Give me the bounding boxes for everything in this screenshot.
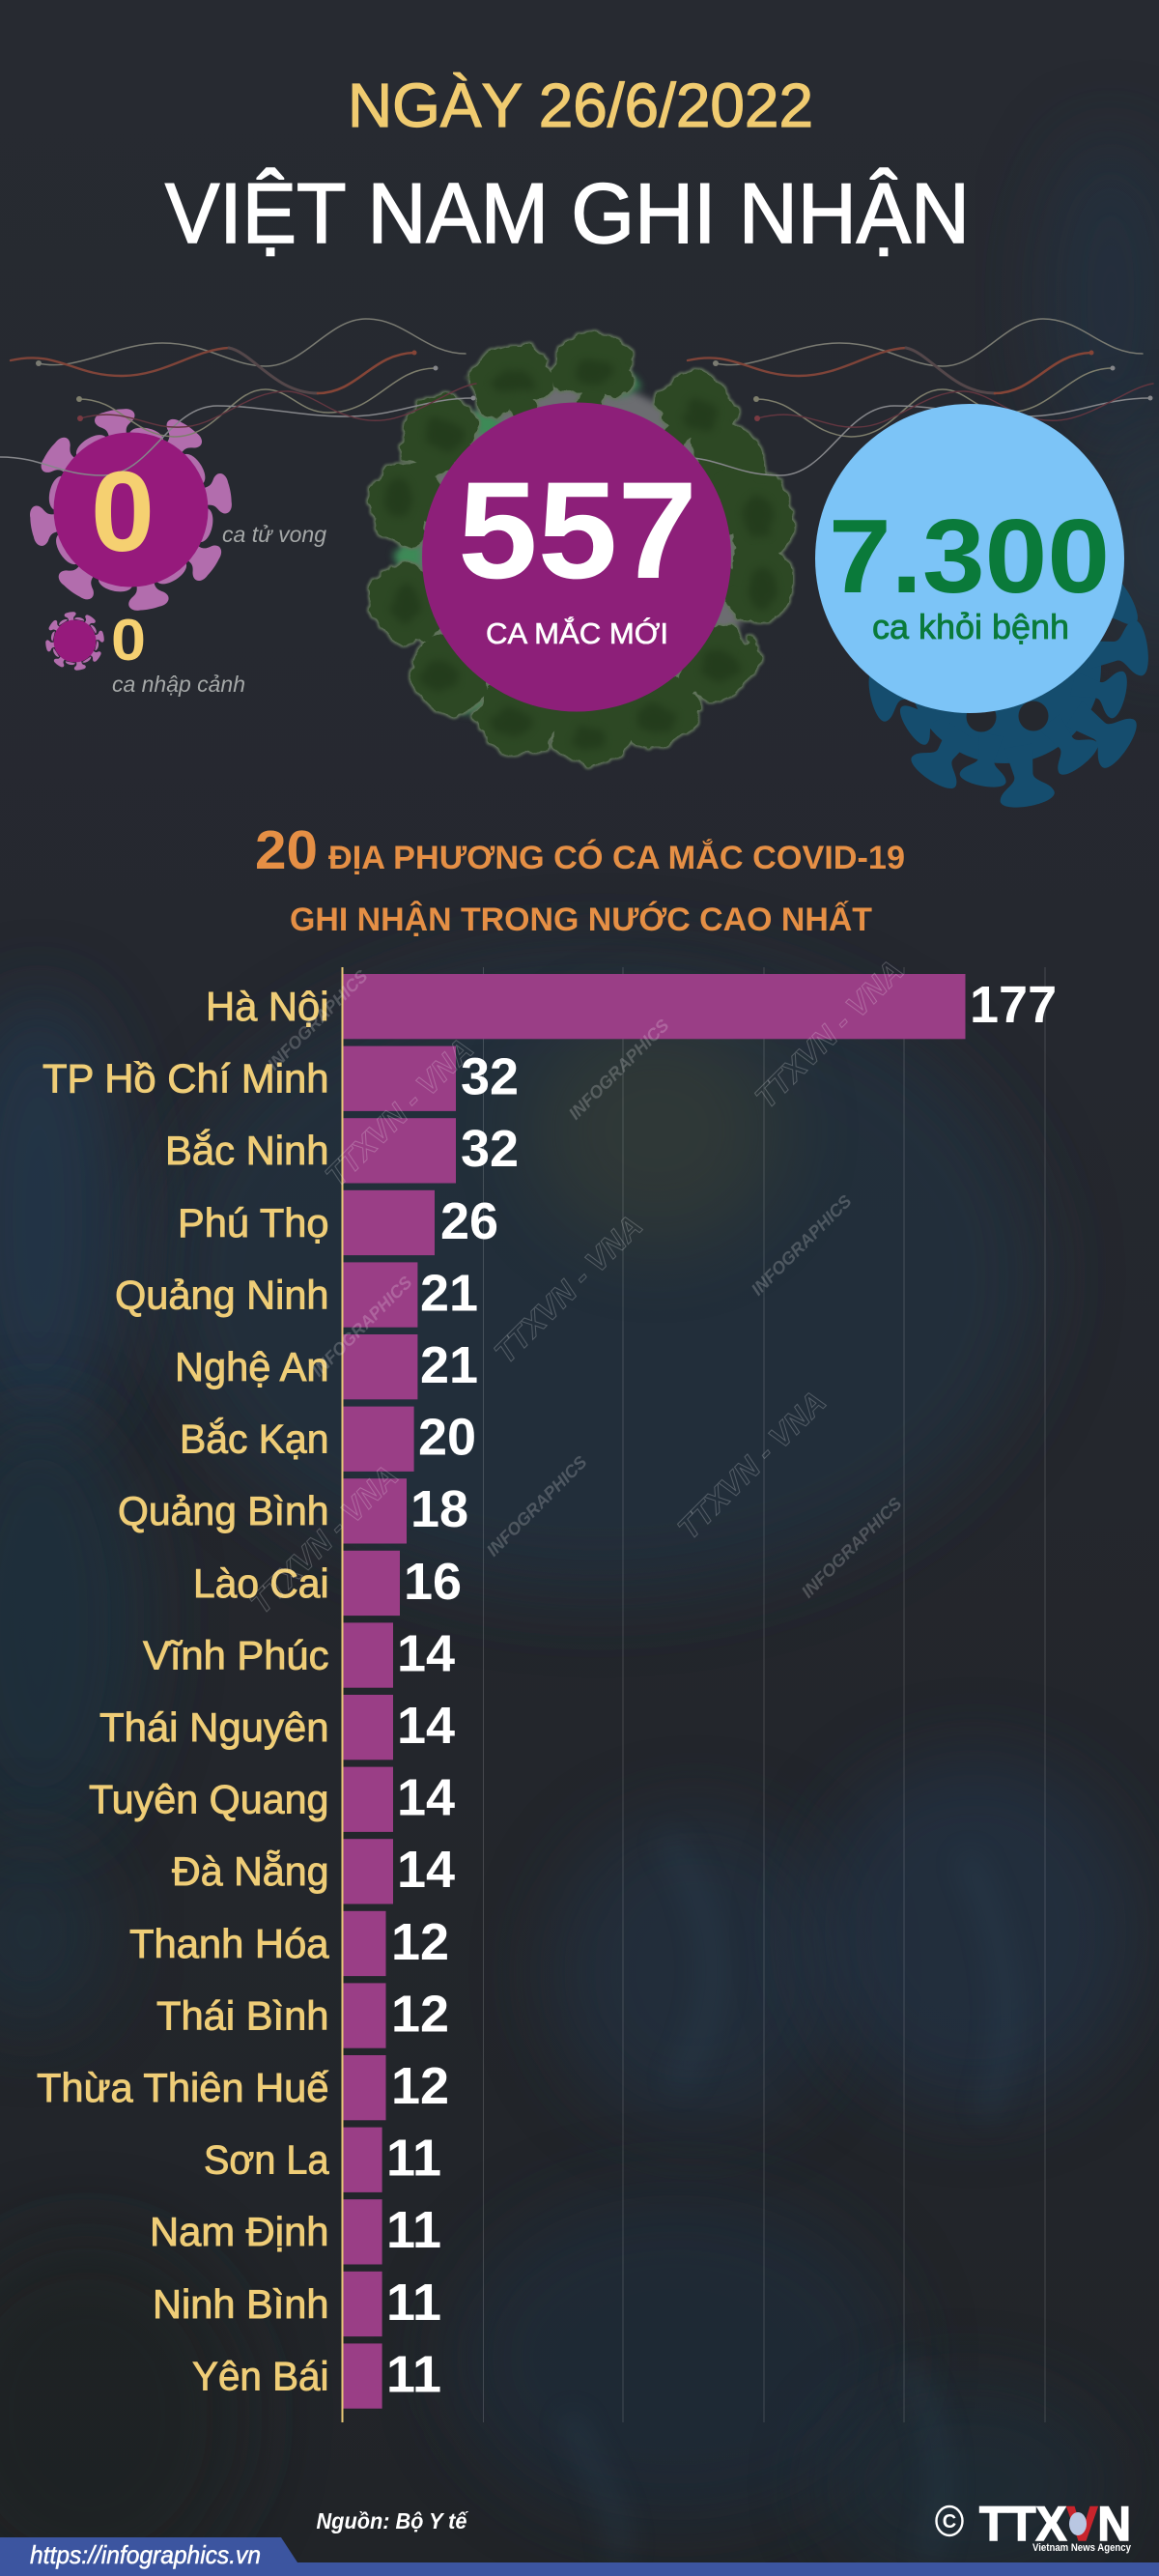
row: Nghệ An: Nghệ An: [175, 1344, 328, 1389]
row: TP Hồ Chí Minh: [42, 1046, 519, 1111]
row: Nghệ An: [175, 1334, 478, 1399]
stat: new cases: [422, 402, 731, 711]
watermarks: TTXVN - VNA: [670, 1384, 833, 1546]
row: Thanh Hóa: [129, 1911, 449, 1976]
decorative flowing lines, right: [677, 319, 1153, 475]
stat: imported cases: [111, 608, 245, 697]
row: Thừa Thiên Huế: [37, 2055, 449, 2120]
row: Tuyên Quang: [89, 1767, 455, 1832]
row: Ninh Bình: [153, 2272, 441, 2336]
stat: deaths: ca tử vong: [222, 522, 326, 547]
watermarks: TTXVN - VNA: [318, 1031, 480, 1193]
row: Quảng Ninh: [115, 1262, 478, 1328]
watermarks: INFOGRAPHICS: [264, 966, 372, 1074]
watermarks: INFOGRAPHICS: [565, 1016, 673, 1124]
row: Đà Nẵng: [172, 1839, 455, 1903]
logo: TTXVN: C: [943, 2511, 956, 2533]
row: Nghệ An: 21: [420, 1336, 478, 1394]
row: Yên Bái: 11: [386, 2345, 441, 2403]
watermarks: TTXVN - VNA: [487, 1208, 649, 1370]
row: Thái Nguyên: 14: [397, 1697, 455, 1755]
row: Vĩnh Phúc: 14: [397, 1624, 455, 1682]
row: Quảng Ninh: Quảng Ninh: [115, 1272, 328, 1317]
row: Nam Định: Nam Định: [150, 2209, 328, 2254]
row: Thanh Hóa: Thanh Hóa: [129, 1921, 329, 1966]
row: Phú Thọ: [178, 1190, 498, 1255]
row: Sơn La: Sơn La: [204, 2137, 329, 2183]
row: TP Hồ Chí Minh: TP Hồ Chí Minh: [42, 1056, 328, 1102]
row: Thái Bình: [156, 1983, 449, 2048]
row: Hà Nội: 177: [970, 976, 1057, 1034]
source: Nguồn: Bộ Y tế: [317, 2508, 469, 2533]
stat: imported cases: ca nhập cảnh: [112, 672, 245, 697]
row: Đà Nẵng: 14: [397, 1841, 455, 1899]
row: Vĩnh Phúc: [143, 1622, 455, 1688]
row: Quảng Bình: Quảng Bình: [118, 1488, 328, 1533]
stat: new cases: CA MẮC MỚI: [486, 615, 668, 650]
stat: new cases: 557: [458, 454, 697, 608]
watermarks: TTXVN - VNA: [242, 1458, 405, 1620]
row: Lào Cai: Lào Cai: [193, 1560, 328, 1606]
row: Thanh Hóa: 12: [391, 1913, 449, 1971]
row: Yên Bái: [192, 2343, 441, 2409]
row: Hà Nội: [206, 974, 1057, 1039]
watermarks: [242, 953, 910, 1620]
row: Tuyên Quang: Tuyên Quang: [89, 1777, 328, 1822]
stat: deaths: [91, 448, 326, 576]
chart axis: [342, 967, 344, 2422]
row: Thái Nguyên: [99, 1695, 455, 1760]
icon: deaths coronavirus: [28, 407, 234, 613]
icon: imported cases coronavirus: [45, 612, 104, 671]
row: Thừa Thiên Huế: 12: [391, 2057, 449, 2115]
row: Phú Thọ: 26: [440, 1192, 498, 1250]
title: main heading: VIỆT NAM GHI NHẬN: [165, 165, 970, 261]
row: Bắc Kạn: Bắc Kạn: [180, 1417, 328, 1462]
row: Thái Bình: Thái Bình: [156, 1992, 328, 2038]
row: Lào Cai: 16: [404, 1553, 462, 1611]
row: Bắc Ninh: 32: [461, 1120, 519, 1178]
icon: blue coronavirus: [864, 545, 1151, 811]
icon: green coronavirus behind new cases: [361, 331, 799, 766]
row: Lào Cai: [193, 1551, 462, 1616]
row: TP Hồ Chí Minh: 32: [461, 1048, 519, 1106]
row: Hà Nội: Hà Nội: [206, 984, 328, 1029]
logo: TTXVN: TTXVN: [979, 2497, 1131, 2551]
chart heading: GHI NHẬN TRONG NƯỚC CAO NHẤT: [290, 902, 872, 938]
row: Bắc Kạn: 20: [418, 1409, 476, 1467]
title: date: NGÀY 26/6/2022: [348, 71, 813, 140]
logo: TTXVN: Vietnam News Agency: [1032, 2542, 1132, 2554]
chart heading: [255, 819, 905, 938]
stat: recovered: 7.300: [829, 498, 1110, 615]
watermarks: INFOGRAPHICS: [308, 1273, 416, 1381]
row: Phú Thọ: Phú Thọ: [178, 1200, 328, 1245]
footer band: [0, 2537, 1159, 2576]
row: Yên Bái: Yên Bái: [192, 2353, 328, 2398]
footer band: https://infographics.vn: [30, 2540, 261, 2569]
stat: deaths: 0: [91, 448, 155, 576]
row: Vĩnh Phúc: Vĩnh Phúc: [143, 1632, 328, 1677]
bar chart: [37, 967, 1057, 2422]
row: Sơn La: [204, 2128, 441, 2192]
row: Nam Định: 11: [386, 2201, 441, 2259]
stat: recovered: ca khỏi bệnh: [872, 607, 1069, 646]
row: Nam Định: [150, 2199, 441, 2265]
row: Quảng Ninh: 21: [420, 1264, 478, 1322]
row: Thừa Thiên Huế: Thừa Thiên Huế: [37, 2065, 328, 2110]
watermarks: INFOGRAPHICS: [483, 1452, 591, 1560]
stat: imported cases: 0: [111, 608, 146, 673]
stat: recovered: [815, 404, 1124, 713]
watermarks: INFOGRAPHICS: [798, 1494, 906, 1602]
chart heading: 20: [255, 819, 318, 881]
row: Ninh Bình: 11: [386, 2274, 441, 2332]
row: Tuyên Quang: 14: [397, 1769, 455, 1827]
watermarks: TTXVN - VNA: [748, 953, 910, 1115]
decorative flowing lines, left: [0, 319, 476, 475]
row: Thái Bình: 12: [391, 1985, 449, 2043]
row: Quảng Bình: [118, 1478, 468, 1544]
watermarks: INFOGRAPHICS: [748, 1191, 856, 1300]
row: Sơn La: 11: [386, 2130, 441, 2188]
chart heading: ĐỊA PHƯƠNG CÓ CA MẮC COVID-19: [328, 840, 905, 876]
row: Ninh Bình: Ninh Bình: [153, 2281, 328, 2327]
row: Bắc Ninh: [165, 1118, 519, 1183]
row: Bắc Kạn: [180, 1407, 476, 1472]
row: Quảng Bình: 18: [410, 1480, 468, 1538]
row: Đà Nẵng: Đà Nẵng: [172, 1848, 328, 1894]
row: Bắc Ninh: Bắc Ninh: [165, 1128, 328, 1173]
row: Thái Nguyên: Thái Nguyên: [99, 1704, 328, 1750]
